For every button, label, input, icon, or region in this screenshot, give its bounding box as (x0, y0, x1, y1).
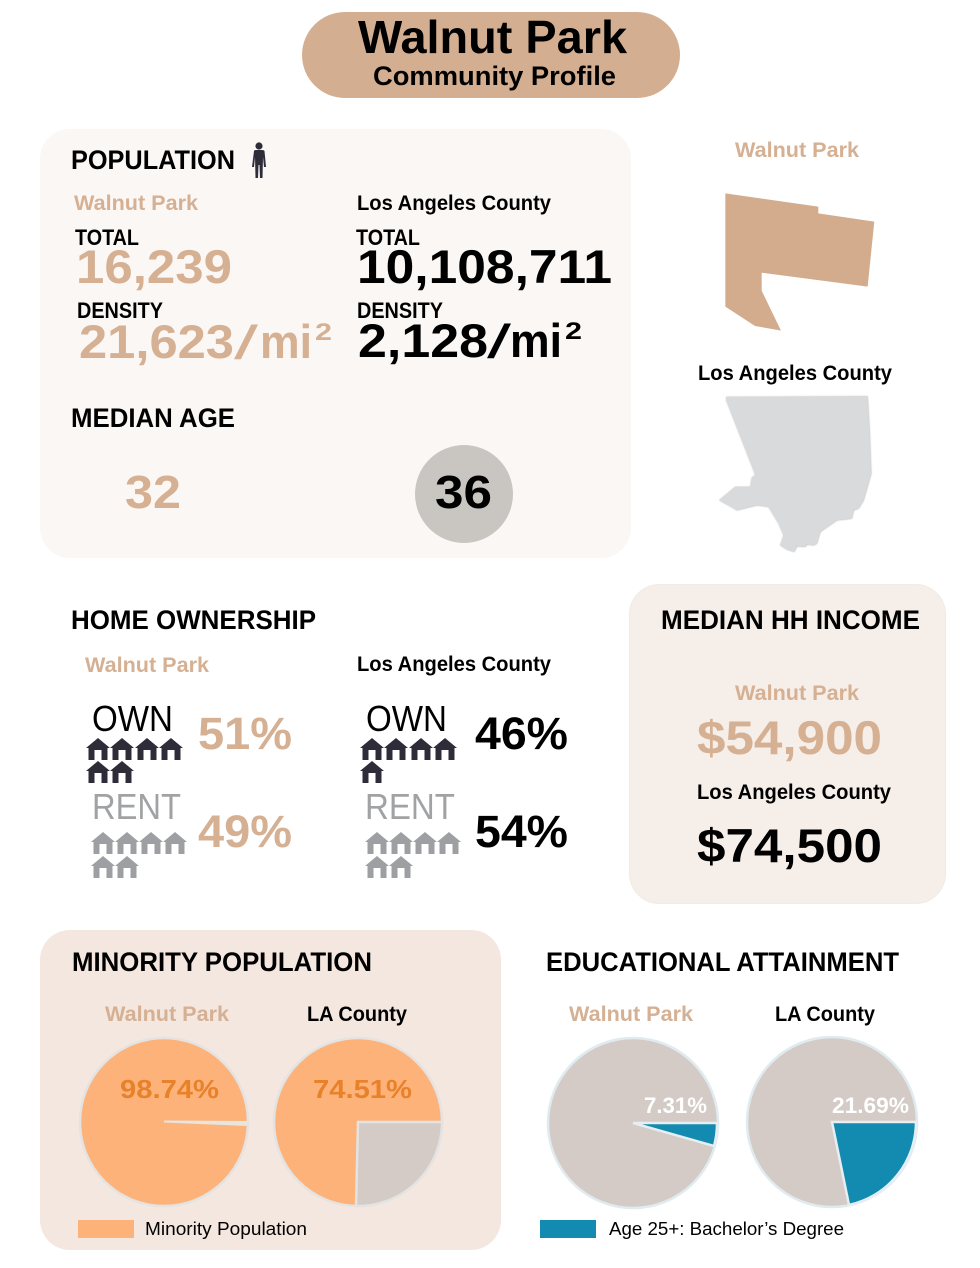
title banner (302, 11, 680, 98)
map: walnut park (725, 139, 874, 331)
label: la county: LA County (775, 1003, 875, 1026)
panel: population (40, 129, 631, 558)
walnut park population stats: 21,623 (79, 315, 234, 368)
walnut park own: 51% (198, 708, 292, 759)
walnut park rent (91, 786, 292, 878)
panel: median household income (630, 584, 946, 904)
county rent: 54% (475, 806, 568, 857)
los angeles county population stats: / (487, 315, 513, 368)
income: county (697, 781, 891, 872)
icon: person (252, 142, 266, 178)
pie chart: walnut park minority: 98.74% (120, 1074, 219, 1104)
county rent: RENT (365, 786, 455, 827)
county own (360, 698, 568, 783)
title banner: Community Profile (373, 61, 616, 91)
county own: OWN (366, 698, 447, 739)
walnut park population stats: DENSITY (77, 298, 163, 323)
heading: population: POPULATION (71, 145, 235, 175)
heading: median age: MEDIAN AGE (71, 403, 235, 433)
los angeles county population stats: mi (510, 314, 562, 367)
pie chart: walnut park education (548, 1038, 718, 1208)
label: la county: LA County (307, 1003, 407, 1026)
pie chart: county education (747, 1037, 917, 1207)
median age: walnut park: 32 (125, 466, 181, 518)
los angeles county population stats: DENSITY (357, 298, 443, 323)
los angeles county population stats: 2 (565, 318, 582, 345)
median age: county badge: 36 (435, 466, 492, 518)
map: walnut park: Walnut Park (735, 139, 859, 162)
los angeles county population stats: TOTAL (356, 225, 420, 250)
los angeles county population stats: 10,108,711 (357, 240, 612, 293)
income: walnut park: $54,900 (697, 711, 882, 764)
section: home ownership (71, 605, 568, 878)
los angeles county population stats (356, 192, 612, 368)
heading: educational attainment: EDUCATIONAL ATTAINMENT (546, 947, 899, 977)
county own: 46% (475, 708, 568, 759)
map: los angeles county (698, 362, 892, 552)
pie chart: walnut park minority (80, 1038, 248, 1206)
walnut park population stats: mi (260, 315, 312, 368)
pie chart: county minority: 74.51% (313, 1074, 412, 1104)
label: walnut park: Walnut Park (569, 1003, 693, 1026)
walnut park population stats: Walnut Park (74, 192, 198, 215)
county label: Los Angeles County (357, 653, 551, 676)
walnut park population stats: 16,239 (76, 240, 232, 293)
median age: county badge (415, 445, 513, 543)
legend: bachelor's degree: Age 25+: Bachelor’s Degree (609, 1219, 844, 1239)
los angeles county population stats: Los Angeles County (357, 192, 551, 215)
walnut park population stats (74, 192, 332, 369)
income: walnut park (697, 682, 882, 764)
heading: median hh income: MEDIAN HH INCOME (661, 605, 920, 635)
map: los angeles county: Los Angeles County (698, 362, 892, 385)
los angeles county population stats: 2,128 (358, 314, 488, 367)
title banner: Walnut Park (358, 11, 627, 63)
walnut park population stats: / (234, 316, 260, 369)
walnut park own (86, 698, 292, 783)
heading: home ownership: HOME OWNERSHIP (71, 605, 316, 635)
pie chart: county education: 21.69% (832, 1093, 909, 1118)
income: walnut park: Walnut Park (735, 682, 859, 705)
walnut park label: Walnut Park (85, 654, 209, 677)
walnut park rent: RENT (92, 786, 181, 827)
section: educational attainment (540, 947, 917, 1239)
panel: minority population (40, 930, 501, 1250)
walnut park population stats: TOTAL (75, 225, 139, 250)
walnut park own: OWN (92, 698, 173, 739)
label: walnut park: Walnut Park (105, 1003, 229, 1026)
income: county: Los Angeles County (697, 781, 891, 804)
legend: minority population (78, 1219, 307, 1239)
walnut park rent: 49% (198, 806, 292, 857)
pie chart: walnut park education: 7.31% (644, 1093, 707, 1118)
income: county: $74,500 (697, 819, 882, 872)
walnut park population stats: 2 (315, 319, 332, 346)
heading: minority population: MINORITY POPULATION (72, 947, 372, 977)
pie chart: county minority (274, 1038, 442, 1206)
legend: minority population: Minority Population (145, 1219, 307, 1239)
county rent (365, 786, 568, 878)
